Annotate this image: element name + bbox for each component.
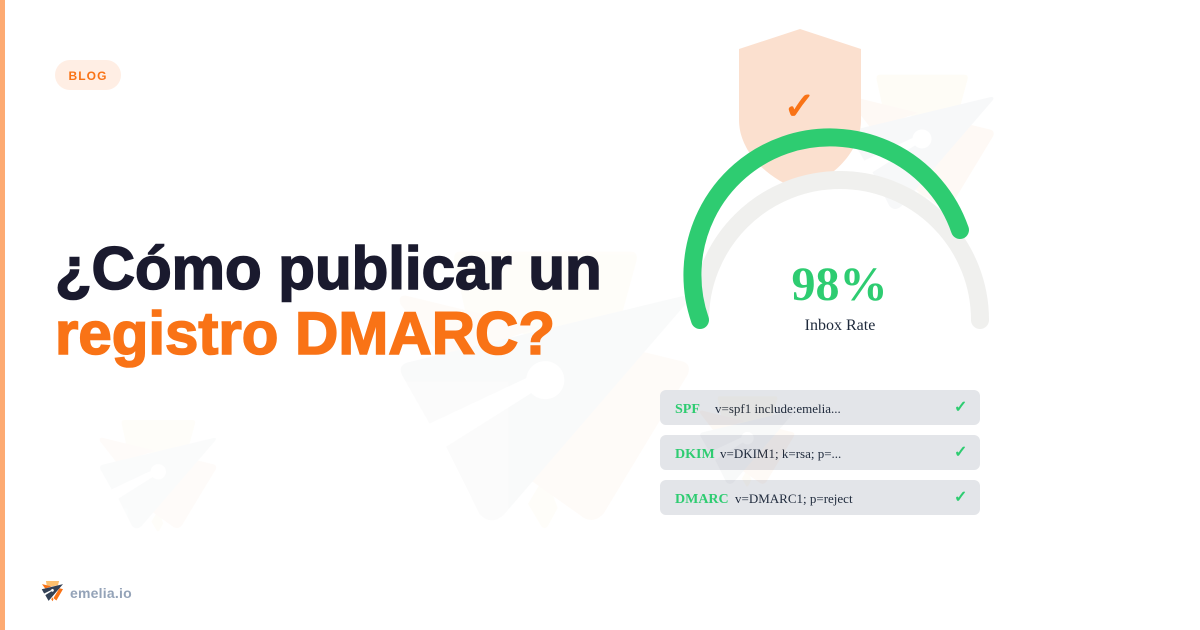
record row: DKIM: DKIM	[675, 447, 715, 462]
record row: DMARC: v=DMARC1; p=reject	[735, 491, 853, 506]
gauge: inbox rate arc	[683, 128, 989, 329]
icon: shield with check: ✓	[784, 86, 815, 128]
record row: SPF	[660, 390, 980, 425]
record row: SPF: ✓	[954, 399, 967, 416]
icon: emelia mark	[42, 581, 63, 602]
record row: DKIM: v=DKIM1; k=rsa; p=...	[720, 446, 841, 461]
icon: shield with check	[739, 29, 861, 182]
record row: SPF: v=spf1 include:emelia...	[715, 401, 841, 416]
wordmark: emelia.io	[70, 585, 132, 601]
gauge label: Inbox Rate	[805, 317, 875, 334]
left accent bar	[0, 0, 5, 630]
badge: BLOG: BLOG	[68, 69, 108, 83]
gauge value: 98%	[792, 258, 888, 311]
title	[55, 235, 602, 368]
title: ¿Cómo publicar un	[55, 235, 602, 302]
record row: DMARC	[660, 480, 980, 515]
logo: emelia.io	[42, 581, 132, 602]
record row: DMARC: ✓	[954, 489, 967, 506]
record row: DKIM	[660, 435, 980, 470]
title: registro DMARC?	[55, 300, 555, 367]
record row: DKIM: ✓	[954, 444, 967, 461]
record row: SPF: SPF	[675, 402, 700, 417]
badge: BLOG	[55, 60, 121, 90]
record row: DMARC: DMARC	[675, 492, 729, 507]
